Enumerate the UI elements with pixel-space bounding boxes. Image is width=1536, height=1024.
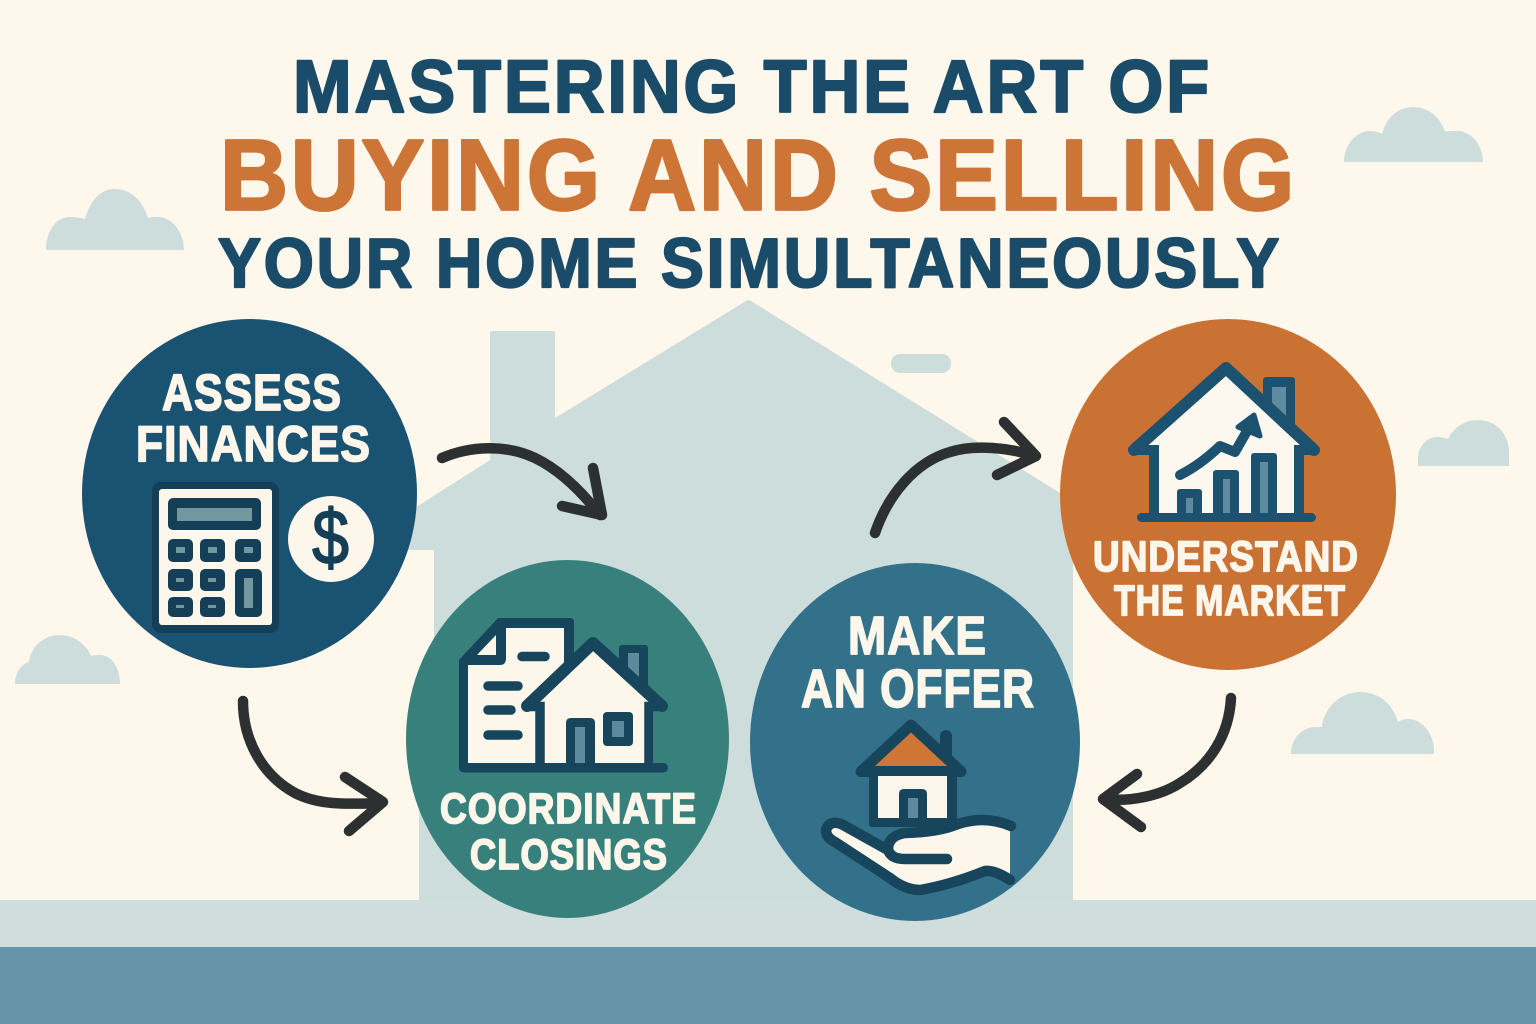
cloud: right small <box>1418 420 1509 466</box>
icon: dollar coin: $ <box>312 494 349 581</box>
label: make: MAKE <box>848 606 987 666</box>
label: an offer: AN OFFER <box>801 659 1035 719</box>
arrow: assess finances to coordinate closings (bottom) <box>243 701 383 831</box>
circle background <box>82 319 417 668</box>
cloud: upper right <box>1344 107 1483 162</box>
ground: dark band <box>0 947 1536 1024</box>
icon: calculator <box>152 482 279 633</box>
background house silhouette <box>380 300 1073 900</box>
panel: understand the market <box>1060 319 1396 670</box>
label: the market: THE MARKET <box>1114 578 1346 625</box>
cloud: upper left <box>46 189 184 250</box>
label: finances: FINANCES <box>136 416 371 472</box>
icon: house on hand <box>826 725 1011 891</box>
icon: document and house <box>459 618 668 772</box>
title line 2: BUYING AND SELLING <box>220 120 1297 232</box>
ground: light band <box>0 900 1536 947</box>
circle background <box>1060 319 1396 670</box>
cloud: small pill <box>891 354 951 373</box>
title line 1: MASTERING THE ART OF <box>293 45 1212 128</box>
cloud: lower right <box>1291 692 1434 754</box>
arrow: understand the market to make an offer <box>1103 698 1231 827</box>
circle background <box>406 560 729 918</box>
panel: make an offer <box>750 563 1080 921</box>
panel: assess finances <box>82 319 417 668</box>
panel: coordinate closings <box>406 560 729 918</box>
circle background <box>750 563 1080 921</box>
label: coordinate: COORDINATE <box>440 786 697 833</box>
cloud: lower left <box>15 635 120 684</box>
title <box>218 45 1297 302</box>
label: assess: ASSESS <box>162 364 342 421</box>
label: closings: CLOSINGS <box>470 832 668 879</box>
title line 3: YOUR HOME SIMULTANEOUSLY <box>218 224 1282 302</box>
arrow: make an offer to understand the market <box>875 422 1036 533</box>
icon: house with market chart <box>1134 368 1316 522</box>
arrow: assess finances to coordinate closings (top) <box>442 448 602 515</box>
label: understand: UNDERSTAND <box>1093 534 1359 581</box>
icon: dollar coin <box>288 494 374 582</box>
